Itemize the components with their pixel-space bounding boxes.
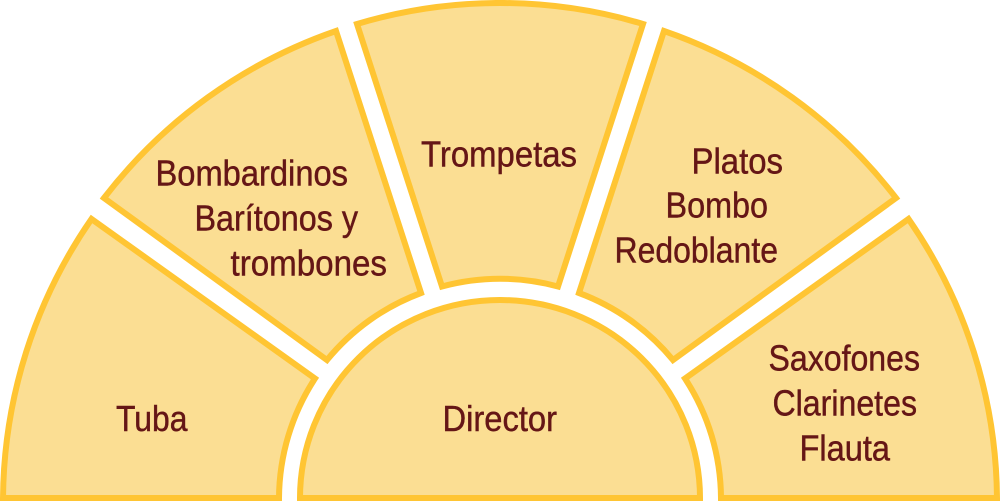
panel: Director: Director bbox=[442, 398, 557, 439]
panel: Director bbox=[300, 300, 700, 498]
panel: Bombardinos, Barítonos y trombones: Barítonos y bbox=[194, 198, 358, 238]
panel: Saxofones, Clarinetes, Flauta bbox=[685, 219, 997, 498]
panel: Bombardinos, Barítonos y trombones: trombones bbox=[230, 242, 387, 284]
panel: Tuba bbox=[3, 219, 315, 498]
panel: Bombardinos, Barítonos y trombones: Bombardinos bbox=[156, 152, 348, 194]
panel: Tuba: Tuba bbox=[116, 398, 188, 439]
panel: Trompetas: Trompetas bbox=[421, 134, 577, 174]
panel: Bombardinos, Barítonos y trombones bbox=[104, 31, 421, 360]
panel: Platos, Bombo, Redoblante bbox=[579, 31, 896, 360]
panel: Saxofones, Clarinetes, Flauta: Flauta bbox=[800, 428, 891, 468]
panel: Platos, Bombo, Redoblante: Redoblante bbox=[614, 230, 778, 270]
panel: Platos, Bombo, Redoblante: Bombo bbox=[666, 184, 768, 226]
panel: Trompetas bbox=[357, 3, 643, 286]
panel: Saxofones, Clarinetes, Flauta: Clarinetes bbox=[772, 382, 917, 424]
panel: Platos, Bombo, Redoblante: Platos bbox=[692, 140, 783, 182]
panel: Saxofones, Clarinetes, Flauta: Saxofones bbox=[768, 338, 920, 378]
